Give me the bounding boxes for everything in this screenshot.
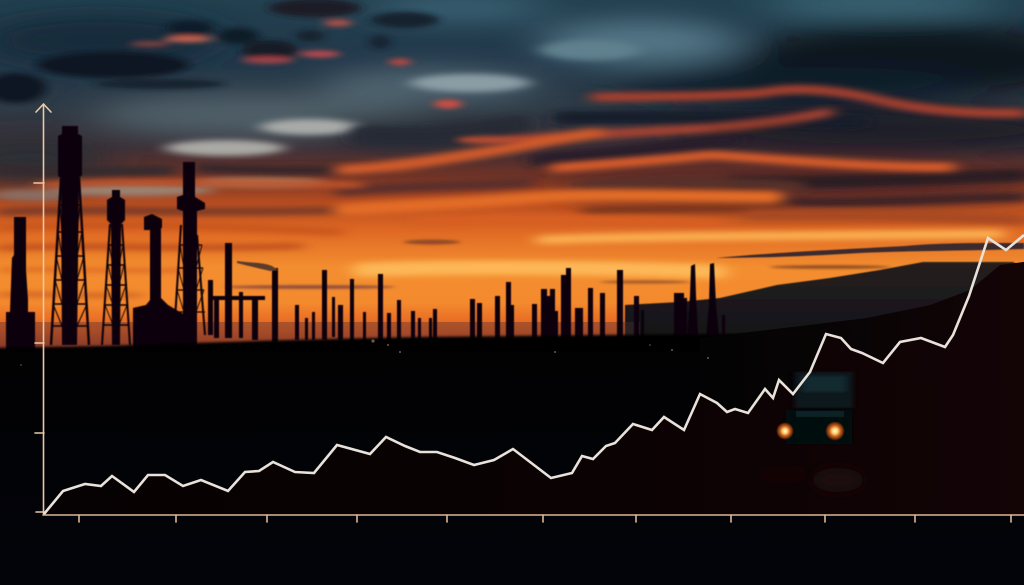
mountain silhouette <box>625 262 1024 360</box>
refinery lights <box>20 339 709 366</box>
area under the line <box>44 262 1024 515</box>
flare stack and pipe rack <box>208 243 278 342</box>
derrick tower 2 <box>102 190 130 345</box>
dark ground <box>0 262 1024 585</box>
refinery silhouettes <box>6 126 725 355</box>
column tower <box>133 214 190 355</box>
sky: thin low clouds <box>225 240 890 289</box>
y axis with arrow <box>34 104 51 514</box>
sky: dark bands <box>0 117 1024 212</box>
left stack tower <box>6 217 35 350</box>
sky: dark clouds and red edges at top <box>0 0 524 144</box>
sky: long dark cloud near the horizon <box>716 243 1024 258</box>
stacks along the horizon <box>295 263 725 342</box>
sunset sky <box>0 0 1024 352</box>
left headlight <box>776 422 794 440</box>
chart axes <box>34 104 1024 522</box>
sky: pale clouds <box>0 40 640 201</box>
dark foreground ridge <box>700 262 1024 515</box>
x axis with ticks <box>43 515 1024 522</box>
derrick tower 3 <box>174 162 205 345</box>
rising price line <box>44 235 1024 514</box>
derrick tower 1 <box>51 126 89 345</box>
road reflections <box>758 470 808 478</box>
sky: glowing red and orange streaks <box>0 89 1024 296</box>
sky: broad cloud masses <box>0 0 1024 207</box>
right headlight <box>825 421 845 441</box>
delivery truck with headlights <box>758 372 864 492</box>
distant horizon haze <box>0 322 640 348</box>
